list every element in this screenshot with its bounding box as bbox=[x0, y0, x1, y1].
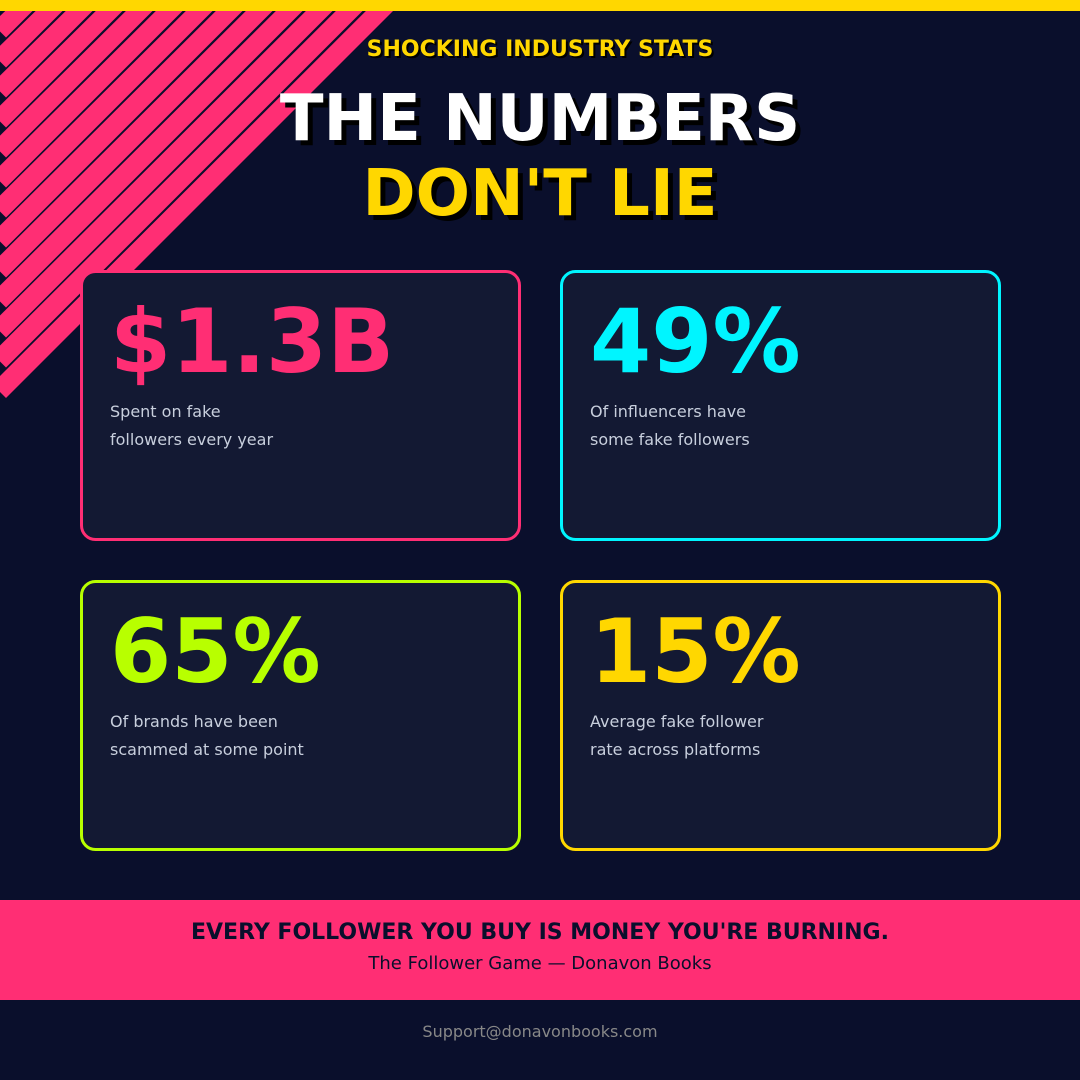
title: THE NUMBERS bbox=[280, 82, 800, 156]
stat number: 15% bbox=[590, 600, 801, 703]
panel: 15% stat bbox=[562, 582, 1000, 850]
callout headline: EVERY FOLLOWER YOU BUY IS MONEY YOU'RE BURNING. bbox=[191, 920, 889, 945]
panel: 65% stat bbox=[82, 582, 520, 850]
stat description: followers every year bbox=[110, 430, 273, 449]
stat description: scammed at some point bbox=[110, 740, 304, 759]
stat number: 49% bbox=[590, 290, 801, 393]
stat description: Spent on fake bbox=[110, 402, 221, 421]
stat description: Of influencers have bbox=[590, 402, 746, 421]
callout credit: The Follower Game — Donavon Books bbox=[367, 953, 712, 974]
eyebrow heading: SHOCKING INDUSTRY STATS bbox=[369, 39, 715, 64]
panel: 49% stat bbox=[562, 272, 1000, 540]
stat description: rate across platforms bbox=[590, 740, 760, 759]
stat description bbox=[590, 712, 764, 759]
stat description bbox=[110, 712, 304, 759]
stat description bbox=[590, 402, 750, 449]
stat number: 65% bbox=[110, 600, 321, 703]
stat description bbox=[110, 402, 273, 449]
stat description: some fake followers bbox=[590, 430, 750, 449]
footer contact: Support@donavonbooks.com bbox=[422, 1022, 658, 1041]
top accent bar bbox=[0, 0, 1080, 11]
title bbox=[280, 82, 805, 236]
eyebrow heading: SHOCKING INDUSTRY STATS bbox=[367, 37, 713, 62]
diagonal stripe pattern bbox=[0, 0, 404, 398]
stat description: Of brands have been bbox=[110, 712, 278, 731]
stat number: $1.3B bbox=[110, 290, 394, 393]
stat description: Average fake follower bbox=[590, 712, 764, 731]
title: THE NUMBERS bbox=[285, 87, 805, 161]
title: DON'T LIE bbox=[368, 162, 722, 236]
panel: $1.3B stat bbox=[82, 272, 520, 540]
title: DON'T LIE bbox=[363, 157, 717, 231]
callout banner bbox=[0, 900, 1080, 1000]
